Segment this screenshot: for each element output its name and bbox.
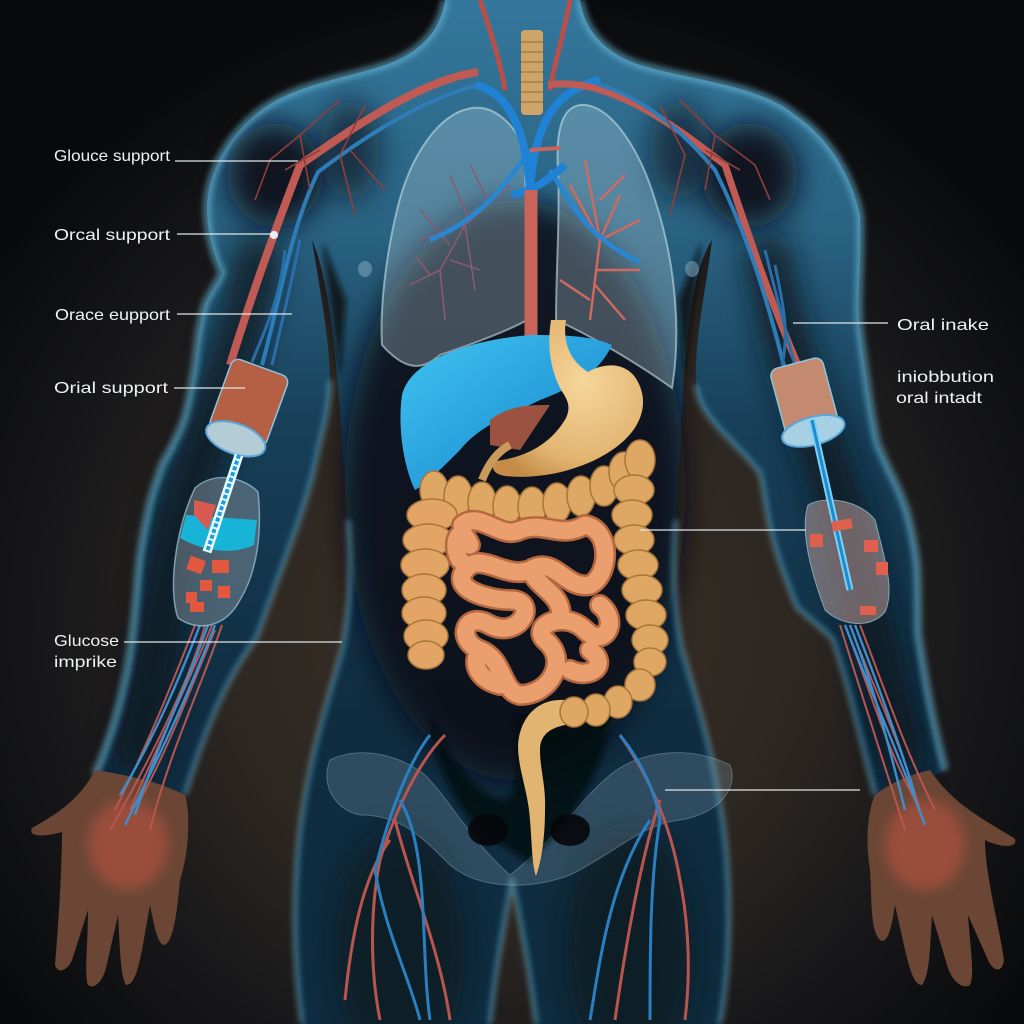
label: oral intadt: oral intadt	[896, 390, 983, 407]
left arm vessels	[230, 72, 478, 365]
neck vessels	[480, 0, 570, 90]
right arm device	[764, 355, 889, 624]
pelvis	[327, 705, 732, 885]
leader lines	[124, 161, 888, 790]
right arm vessels	[548, 84, 800, 370]
upper capsule	[205, 358, 288, 458]
stomach	[493, 320, 643, 477]
label: iniobbution: iniobbution	[897, 369, 994, 386]
left hand	[31, 770, 188, 986]
lower chamber	[173, 478, 259, 626]
arm vessels	[110, 72, 935, 830]
hands	[31, 770, 1015, 986]
intestine body	[456, 521, 609, 695]
lungs	[382, 80, 676, 388]
intestine shadow	[456, 521, 609, 695]
lower chamber	[805, 500, 889, 624]
small intestine	[456, 521, 609, 695]
left lung	[382, 108, 527, 366]
left arm device	[173, 357, 291, 626]
red shard	[194, 500, 216, 530]
label: Glouce support: Glouce support	[54, 148, 171, 165]
syringe shaft	[207, 455, 239, 552]
liver	[400, 335, 612, 490]
label: imprike: imprike	[54, 654, 117, 671]
trachea	[521, 30, 543, 115]
syringe shaft	[812, 420, 850, 590]
upper capsule	[770, 357, 846, 448]
red particles	[186, 556, 230, 612]
right hand	[868, 770, 1015, 986]
vessels	[430, 150, 640, 262]
transverse colon	[420, 440, 655, 527]
large intestine	[401, 440, 668, 727]
bronchial trees	[410, 165, 510, 320]
blue fluid	[180, 515, 257, 551]
rectum	[518, 700, 565, 876]
ascending colon	[401, 499, 457, 669]
leg vessels	[345, 735, 688, 1020]
label: Orcal support: Orcal support	[54, 227, 171, 244]
spleen	[490, 405, 550, 450]
label: Orial support: Orial support	[54, 380, 169, 397]
descending colon	[560, 475, 668, 727]
label: Oral inake: Oral inake	[897, 317, 989, 334]
label: Orace eupport: Orace eupport	[55, 307, 171, 324]
label: Glucose: Glucose	[54, 633, 119, 650]
right lung	[556, 105, 676, 388]
